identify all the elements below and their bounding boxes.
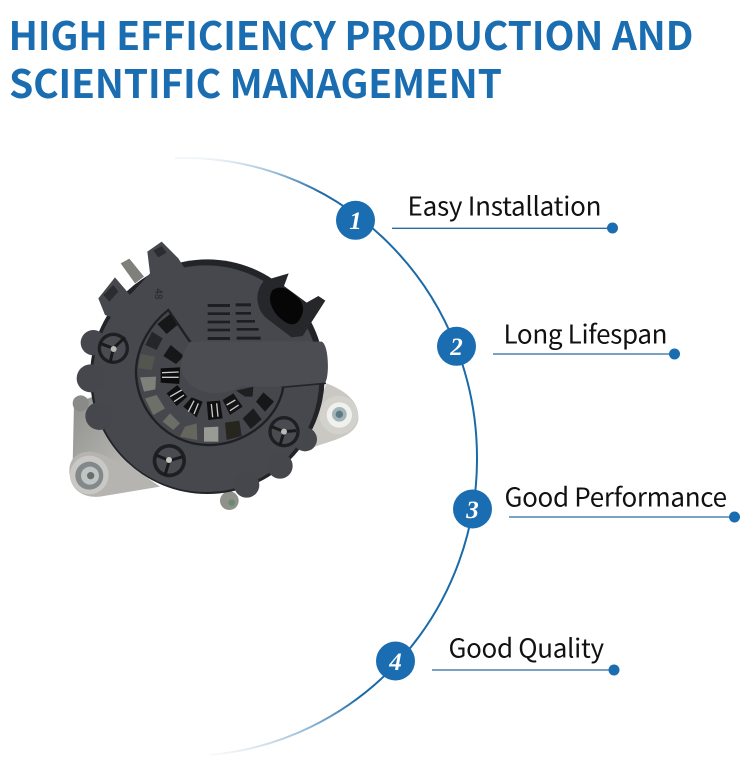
grommet top left — [98, 333, 129, 364]
silver housing — [69, 383, 358, 497]
alternator photo illustration — [69, 242, 358, 510]
bottom bolt — [220, 491, 239, 510]
title: SCIENTIFIC MANAGEMENT — [9, 54, 502, 110]
grommet lower right — [268, 416, 300, 447]
badge 4 — [376, 642, 415, 680]
leader line 3 — [509, 512, 740, 522]
item 1: easy installation — [336, 186, 618, 240]
bright fins inside the slots — [162, 372, 239, 417]
badge 2: 2 — [449, 334, 463, 361]
item 4: good quality — [376, 628, 620, 680]
threaded stud — [121, 259, 144, 283]
fan grille slots — [138, 314, 274, 442]
item 2: long lifespan — [437, 314, 680, 366]
fan grille ring — [136, 310, 283, 445]
badge 2 — [437, 327, 476, 366]
badge 1: 1 — [349, 208, 362, 235]
rear cover — [93, 242, 319, 492]
leader line 4 — [432, 664, 620, 676]
grommet bottom — [153, 444, 186, 477]
badge 1 — [336, 201, 375, 240]
vent slits — [208, 303, 261, 340]
grommets and round lobes — [77, 330, 317, 498]
item 3: good performance — [453, 478, 740, 528]
curved timeline arc — [175, 158, 477, 755]
connector bracket holes — [103, 246, 167, 302]
label 1: Easy Installation — [408, 186, 602, 224]
rear cover dark rim — [90, 259, 325, 494]
plate edge shadow — [282, 383, 326, 387]
title — [8, 6, 694, 110]
leader line 2 — [493, 348, 680, 360]
leader line 1 — [392, 222, 618, 234]
badge 3 — [453, 490, 492, 528]
badge 3: 3 — [465, 497, 479, 524]
mounting bolt right — [319, 396, 358, 434]
embossed marking: 48 — [152, 288, 167, 300]
label 4: Good Quality — [448, 628, 604, 666]
label 3: Good Performance — [504, 478, 727, 514]
title: HIGH EFFICIENCY PRODUCTION AND — [8, 6, 694, 62]
label 2: Long Lifespan — [504, 314, 668, 352]
plug connector — [257, 273, 325, 337]
badge 4: 4 — [388, 649, 402, 676]
fan cover plate — [181, 342, 328, 393]
mounting bolt bottom left — [70, 456, 109, 494]
